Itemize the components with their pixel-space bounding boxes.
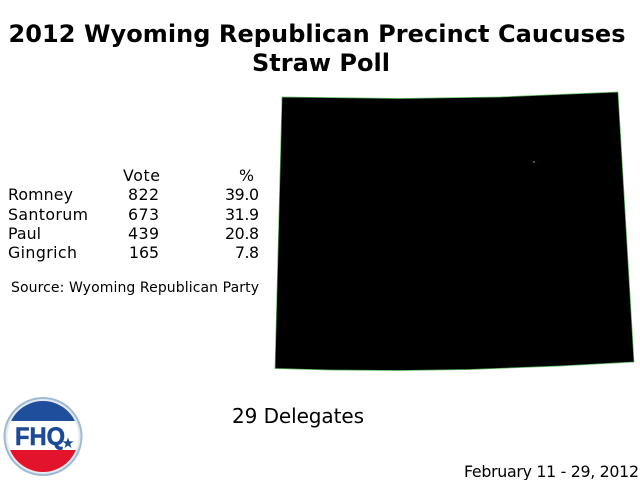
delegates label: 29 Delegates [232, 404, 364, 428]
row: Gingrich: 165 [129, 243, 159, 262]
row: Paul: 439 [128, 224, 159, 243]
title: Straw Poll [252, 49, 390, 77]
title: 2012 Wyoming Republican Precinct Caucuses [8, 20, 626, 48]
row: Romney: 39.0 [225, 185, 259, 204]
table header: Vote [123, 166, 160, 185]
row: Gingrich: 7.8 [235, 243, 259, 262]
row: Romney: Romney [8, 185, 73, 204]
row: Paul [8, 224, 259, 243]
table header [123, 166, 254, 185]
map marker [533, 161, 535, 163]
logo: FHQ badge [0, 397, 86, 476]
row: Gingrich: Gingrich [8, 243, 77, 262]
table header: % [239, 166, 254, 185]
row: Santorum: 673 [128, 205, 159, 224]
row: Santorum: Santorum [8, 205, 88, 224]
logo star [62, 438, 74, 448]
map: Wyoming [275, 92, 634, 370]
row: Romney: 822 [128, 185, 159, 204]
source note: Source: Wyoming Republican Party [11, 280, 259, 296]
row: Romney [8, 185, 259, 204]
logo: FHQ badge: FHQ [15, 423, 65, 451]
results table [8, 166, 259, 262]
row: Gingrich [8, 243, 259, 262]
row: Santorum [8, 205, 259, 224]
row: Santorum: 31.9 [225, 205, 259, 224]
row: Paul: Paul [8, 224, 41, 243]
title [8, 20, 626, 77]
row: Paul: 20.8 [225, 224, 259, 243]
